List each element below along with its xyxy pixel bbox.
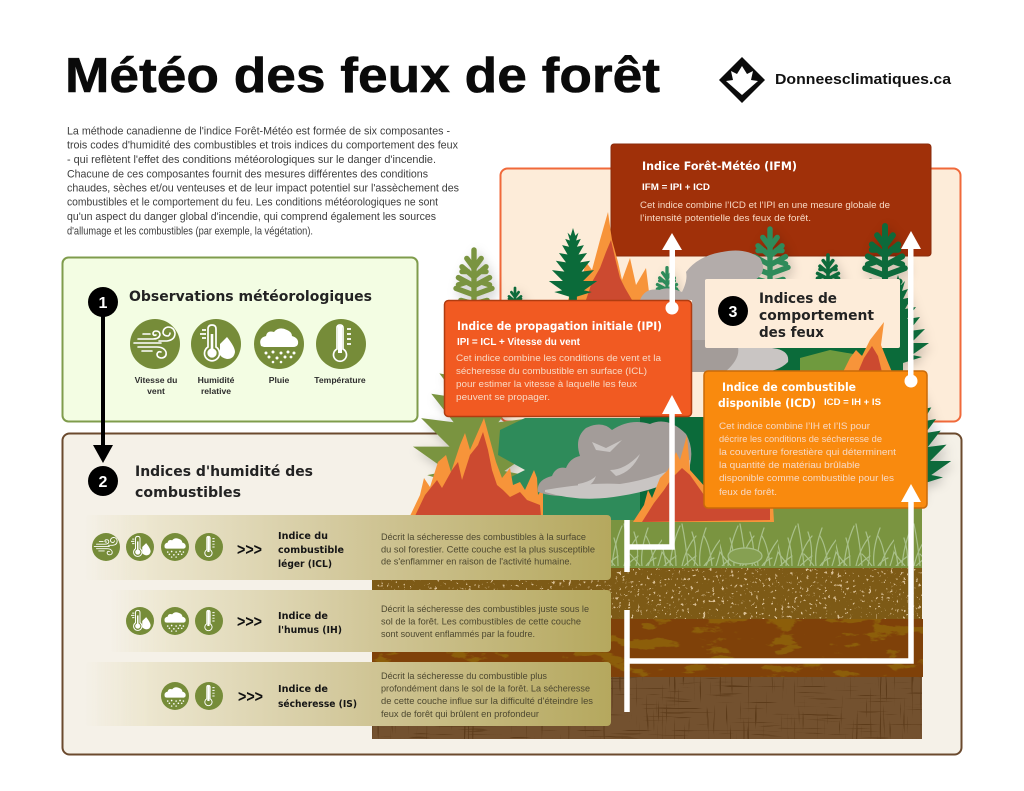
row: Indice de sécheresse: Indice de [278,684,328,695]
heading 3: comportement [759,308,874,324]
text: Indice Forêt-Météo: IFM = IPI + ICD [642,182,711,192]
box: Indice de propagation initiale: sécheresse du combustible en surface (ICL) [456,366,647,377]
icon: pluie [254,319,304,369]
right-centre flame [633,435,774,522]
badge 3: 3 [729,304,738,321]
badge 1 [88,287,118,317]
row: Indice de sécheresse [85,662,611,726]
box: Indice de propagation initiale: Cet indice combine les conditions de vent et la [456,353,662,364]
box: Indices de comportement des feux [705,279,900,348]
icon: vitesse du vent [130,319,180,369]
box: Indice de propagation initiale [444,300,692,416]
left flame [410,418,543,516]
lower smoke [538,422,691,496]
box: Indice Forêt-Météo background [611,144,931,256]
row: Indice de sécheresse: >>> [238,687,263,706]
box: Indice de propagation initiale: pour estimer la vitesse à laquelle les feux [456,379,637,390]
arrow: IPI to IFM [662,233,682,314]
title: Météo des feux de forêt [65,49,660,103]
icon labels: Humidité [198,375,235,385]
box: Indice de combustible disponible: décrire les conditions de sécheresse de [719,434,882,445]
row: Indice du combustible léger: combustible [278,545,344,556]
icon labels: vent [147,386,165,396]
panel: observations météorologiques [62,258,418,422]
badge 2 [88,466,118,496]
heading 3: des feux [759,325,825,341]
intro text block: combustibles et le comportement du feu. Les conditions météorologiques ne sont [67,196,438,208]
box: Indice de combustible disponible: ICD = IH + IS [824,397,881,408]
arrow: IH and IS to ICD [625,484,921,712]
row: Indice de l'humus [110,590,611,652]
text: Indice Forêt-Météo: l’intensité potentielle des feux de forêt. [640,213,811,224]
panel: comportement des feux [500,168,960,422]
row: Indice de l'humus: sont souvent enflammés par la foudre. [381,629,535,639]
heading: indices d'humidité: Indices d'humidité des [135,464,313,480]
box: Indice de combustible disponible: feux de forêt. [719,487,777,498]
upper smoke [640,250,763,348]
intro text block [67,126,459,238]
intro text block: La méthode canadienne de l'indice Forêt-Météo est formée de six composantes - [67,126,450,138]
box: Indice de combustible disponible: la couverture forestière qui déterminent [719,447,896,458]
small flame [843,322,892,372]
row: Indice de l'humus: >>> [237,612,262,631]
row: Indice de sécheresse: Décrit la sécheresse du combustible plus [381,671,547,681]
box: Indice de combustible disponible: la quantité de matériau brûlable [719,460,860,471]
box: Indice de combustible disponible: disponible (ICD) [718,396,816,410]
forest illustration [410,212,951,522]
badge 2: 2 [99,474,108,491]
box: Indice de combustible disponible: disponible comme combustible pour les [719,473,894,484]
row: Indice du combustible léger: >>> [237,540,262,559]
icon: humidité relative [191,319,241,369]
intro text block: chaudes, sèches et/ou venteuses et de leur impact potentiel sur l'assèchement des [67,182,459,194]
row: Indice de sécheresse: feux de forêt qui brûlent en profondeur [381,709,539,719]
icon labels: Pluie [269,375,289,385]
box: Indice de propagation initiale: peuvent se propager. [456,392,550,403]
intro text block: d'allumage et les combustibles (par exemple, la végétation). [67,226,313,238]
intro text block: qu'un aspect du danger global d'incendie, qui comprend également les sources [67,211,436,223]
logo: Donneesclimatiques.ca: Donneesclimatiques.ca [775,71,952,88]
box: Indice de combustible disponible [704,371,927,508]
box: Indice de propagation initiale: IPI = ICL + Vitesse du vent [457,337,581,348]
box: Indice de combustible disponible: Cet indice combine l’IH et l’IS pour [719,421,871,432]
logo: Donneesclimatiques.ca [719,57,952,103]
text: Indice Forêt-Météo [640,159,890,224]
row: Indice du combustible léger: Indice du [278,531,328,542]
row: Indice de sécheresse: de cette couche influe sur la difficulté d'éteindre les [381,696,593,706]
row: Indice de sécheresse: profondément dans le sol de la forêt. La sécheresse [381,684,590,694]
panel: indices d'humidité [62,434,962,754]
row: Indice du combustible léger: Décrit la sécheresse des combustibles à la surface [381,532,586,542]
row: Indice du combustible léger: léger (ICL) [278,558,332,570]
heading: indices d'humidité: combustibles [135,485,241,501]
arrow: ICD to IFM [901,231,921,388]
heading: observations: Observations météorologiques [129,289,372,305]
row: Indice du combustible léger: du sol forestier. Cette couche est la plus susceptible [381,544,595,554]
badge 3 [718,296,748,326]
big trees [413,226,951,512]
heading: indices d'humidité [135,464,313,501]
row: Indice du combustible léger [85,515,611,580]
badge 1: 1 [99,295,108,312]
intro text block: trois codes d'humidité des combustibles et trois indices du comportement des feux [67,140,459,152]
intro text block: - qui reflètent l'effet des conditions météorologiques sur le danger d'incendie. [67,154,436,166]
intro text block: Chacune de ces composantes fournit des mesures différentes des conditions [67,168,428,180]
text: Indice Forêt-Météo: Indice Forêt-Météo (IFM) [642,159,797,173]
box: Indice de propagation initiale: Indice de propagation initiale (IPI) [457,319,662,333]
heading 3: Indices de [759,291,837,307]
heading 3 [759,291,874,341]
row: Indice de l'humus: Indice de [278,611,328,622]
icon labels: Vitesse du [135,375,177,385]
icon labels: relative [201,386,231,396]
icon labels [135,375,366,396]
row: Indice de l'humus: sol de la forêt. Les combustibles de cette couche [381,616,581,626]
box: Indice de combustible disponible: Indice de combustible [722,380,856,394]
icon: température [316,319,366,369]
row: Indice du combustible léger: de s'enflammer en raison de l'activité humaine. [381,556,572,566]
row: Indice de l'humus: l'humus (IH) [278,625,342,636]
top flame [568,212,650,300]
row: Indice de sécheresse: sécheresse (IS) [278,698,357,710]
text: Indice Forêt-Météo: Cet indice combine l’ICD et l’IPI en une mesure globale de [640,200,890,211]
soil and grass layers [372,518,923,739]
icon labels: Température [314,375,366,385]
arrow: observations to humidity indices [93,300,113,463]
arrow: ICL to IPI [625,395,682,572]
row: Indice de l'humus: Décrit la sécheresse des combustibles juste sous le [381,604,589,614]
